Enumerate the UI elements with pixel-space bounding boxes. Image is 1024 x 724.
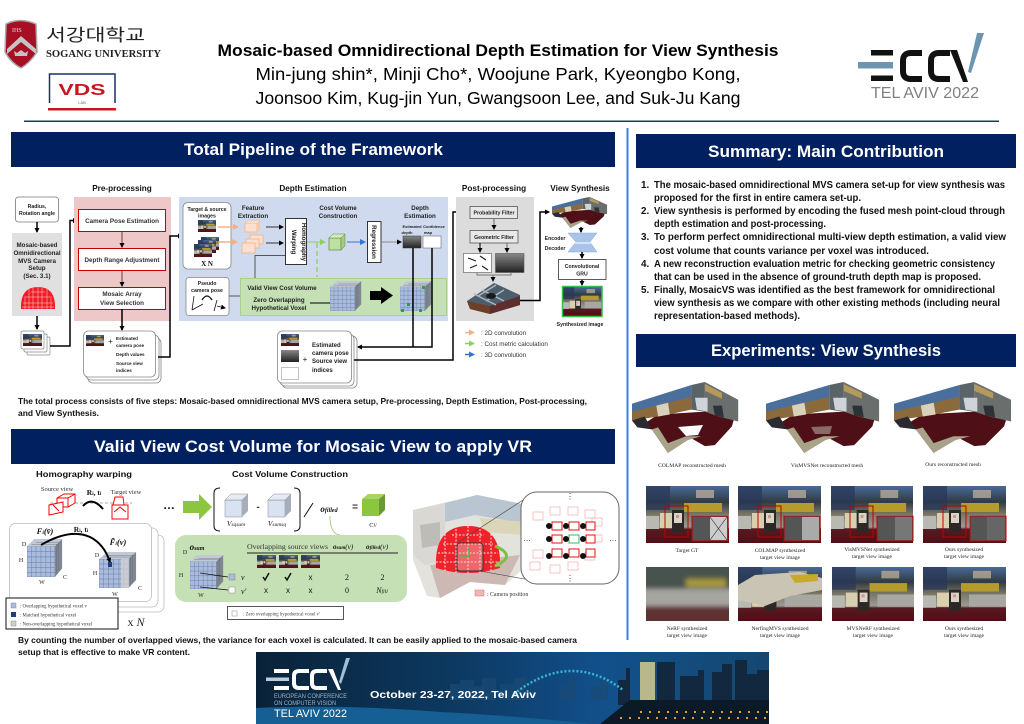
panel: overlapping table: D bbox=[183, 550, 188, 556]
panel: cost volume construction: Cost Volume Construction bbox=[232, 470, 348, 479]
panel: valid view cost volume: Hypothetical Voxel bbox=[252, 305, 307, 312]
panel: synthesized views row 1: target view image bbox=[852, 554, 892, 560]
panel: overlapping table: v bbox=[241, 573, 245, 582]
legend: voxel types: : Non-overlapping hypothetical voxel bbox=[20, 622, 93, 628]
panel: homography warping: Source view bbox=[41, 486, 73, 493]
panel: overlapping table: x bbox=[308, 586, 312, 595]
panel: reconstructed meshes: Ours reconstructed mesh bbox=[925, 462, 981, 468]
panel: homography warping: D bbox=[95, 553, 100, 559]
panel: MVS camera setup: Rotation angle bbox=[19, 211, 55, 217]
panel: homography warping: Fi(v̄) bbox=[36, 526, 53, 536]
banner: ECCV conference bbox=[256, 652, 769, 724]
text: summary list: The mosaic-based omnidirectional MVS camera set-up for view synthesis was bbox=[654, 180, 1005, 191]
heading: Experiments: Experiments: View Synthesis bbox=[711, 342, 941, 360]
panel: homography warping bbox=[6, 470, 175, 629]
heading: Summary: Summary: Main Contribution bbox=[708, 143, 944, 161]
panel: overlapping table: Nfill bbox=[375, 586, 388, 595]
heading: Summary bbox=[636, 134, 1016, 168]
box: target and source images: images bbox=[198, 214, 216, 220]
panel: homography warping: Ri, ti bbox=[87, 488, 102, 497]
panel: synthesized views row 2: NeRF synthesized bbox=[667, 626, 708, 632]
text: summary list bbox=[641, 180, 1006, 322]
text: pipeline caption bbox=[18, 396, 587, 418]
panel: view synthesis: Synthesized image bbox=[557, 322, 603, 328]
panel: pre-processing output stack: Source view bbox=[116, 361, 143, 366]
panel: synthesized views row 2: MVSNeRF synthesized bbox=[846, 626, 900, 632]
heading: Valid View Cost Volume bbox=[11, 429, 615, 464]
panel: depth estimation bbox=[179, 197, 448, 321]
panel: mosaic camera room: ⋮ bbox=[566, 492, 574, 501]
panel: pre-processing output stack: + bbox=[108, 337, 113, 346]
logo: Sogang University bbox=[5, 20, 161, 68]
text: summary list: A new reconstruction evaluation metric for checking geometric consistency bbox=[654, 259, 995, 270]
icon: red camera dome bbox=[21, 287, 55, 309]
heading: Valid View Cost Volume: Valid View Cost Volume for Mosaic View to apply VR bbox=[94, 438, 532, 456]
text: cost volume caption bbox=[18, 635, 577, 657]
text: summary list: view synthesis as we compare with other existing methods (including neural bbox=[654, 298, 1000, 309]
panel: overlapping table: v′ bbox=[241, 587, 247, 596]
panel: MVS camera setup: Setup bbox=[28, 265, 46, 272]
panel: homography warping: W bbox=[112, 592, 118, 598]
text: summary list: To perform perfect omnidirectional multi-view depth estimation, a valid view bbox=[654, 232, 1006, 243]
panel: overlapping table: W bbox=[198, 593, 204, 599]
panel: reconstructed meshes: COLMAP reconstructed mesh bbox=[658, 463, 726, 469]
panel: synthesized views row 2: NerfingMVS synthesized bbox=[751, 625, 809, 632]
panel: homography warping: Target view bbox=[111, 489, 142, 496]
legend: zero overlapping voxel bbox=[228, 606, 344, 620]
feature extraction: Extraction bbox=[238, 213, 268, 220]
panel: mosaic camera room bbox=[413, 492, 619, 598]
panel: depth estimation: Depth bbox=[411, 205, 429, 212]
panel: homography warping: x N bbox=[127, 615, 145, 629]
mosaic camera grid bbox=[530, 507, 602, 573]
text: summary list: 5. bbox=[641, 285, 649, 296]
panel: overlapping table: ofilled(v) bbox=[366, 543, 389, 551]
panel: MVS camera setup bbox=[12, 197, 62, 355]
equation: ofilled bbox=[320, 504, 339, 514]
panel: synthesized views row 1: Ours synthesized bbox=[945, 547, 983, 553]
box: regression bbox=[368, 222, 381, 262]
text: summary list: representation-based methods). bbox=[654, 311, 800, 322]
panel: depth output stack: indices bbox=[312, 368, 333, 374]
panel: MVS camera setup: Mosaic-based bbox=[17, 242, 58, 249]
text: summary list: depth estimation and post-processing. bbox=[654, 219, 826, 230]
panel: homography warping: Homography warping bbox=[36, 470, 132, 479]
stacked feature cards bbox=[10, 524, 164, 612]
panel: homography warping: Ri, ti bbox=[74, 525, 89, 534]
logo: VDS lab: LAB bbox=[78, 100, 86, 105]
panel: section titles of pipeline: Pre-processing bbox=[92, 184, 152, 193]
panel: homography warping: H bbox=[19, 558, 24, 564]
panel: cost volume construction bbox=[175, 470, 407, 620]
text: summary list: 2. bbox=[641, 206, 649, 217]
title: Min-jung shin*, Minji Cho*, Woojune Park, Kyeongbo Kong, bbox=[256, 64, 740, 84]
panel: section titles of pipeline bbox=[92, 184, 610, 193]
panel: overlapping table: x bbox=[264, 586, 268, 595]
panel: homography warping: C bbox=[63, 575, 67, 581]
equation: CV bbox=[369, 522, 378, 529]
panel: mosaic camera room: ⋮ bbox=[566, 574, 574, 583]
panel: overlapping table: 2 bbox=[345, 573, 349, 582]
panel: view synthesis: Convolutional bbox=[565, 264, 600, 270]
box: pseudo camera pose: Pseudo bbox=[198, 281, 216, 287]
panel: section titles of pipeline: View Synthesis bbox=[550, 184, 610, 193]
box: target and source images: Target & source bbox=[187, 207, 227, 213]
text: summary list: 3. bbox=[641, 232, 649, 243]
icon: source and target cameras bbox=[49, 494, 132, 519]
equation: - bbox=[256, 502, 260, 513]
logo: Sogang University: 서강대학교 bbox=[46, 26, 145, 45]
panel: valid view cost volume bbox=[240, 278, 446, 316]
panel: pre-processing output stack: Depth values bbox=[116, 352, 145, 357]
panel: reconstructed meshes bbox=[632, 382, 1011, 469]
icon: green cube bbox=[329, 234, 345, 250]
title bbox=[218, 42, 778, 108]
text: summary list: 1. bbox=[641, 180, 649, 191]
text: pipeline caption: and View Synthesis. bbox=[18, 408, 99, 418]
equation: Vsqsum bbox=[227, 519, 245, 528]
text: summary list: 4. bbox=[641, 259, 649, 270]
text: pipeline caption: The total process consists of five steps: Mosaic-based omnidirectional MVS camera setup, Pre-processing, Depth Estimation, Post-processing, bbox=[18, 396, 587, 406]
logo: ECCV Tel Aviv 2022: TEL AVIV 2022 bbox=[871, 85, 979, 102]
panel: overlapping table: x bbox=[308, 573, 312, 582]
logo: Sogang University: SOGANG UNIVERSITY bbox=[46, 49, 161, 60]
panel: homography warping: F̃i(v) bbox=[109, 537, 126, 547]
panel: synthesized views row 2: target view image bbox=[667, 633, 707, 639]
legend: voxel types: : Overlapping hypothetical voxel v bbox=[20, 604, 87, 610]
panel: synthesized views row 2: target view image bbox=[853, 633, 893, 639]
panel: synthesized views row 2: target view image bbox=[944, 633, 984, 639]
panel: depth output stack: camera pose bbox=[312, 351, 349, 357]
panel: mosaic camera room: … bbox=[523, 534, 531, 543]
panel: pre-processing: Depth Range Adjustment bbox=[85, 257, 160, 264]
arrow: green bbox=[183, 494, 212, 520]
equation: = bbox=[352, 502, 358, 513]
box: target and source images: X N bbox=[201, 260, 213, 268]
text: summary list: View synthesis is performed by encoding the fused mesh point-cloud through bbox=[654, 206, 1005, 217]
text: summary list: that can be used in the absence of ground-truth depth map is proposed. bbox=[654, 272, 981, 283]
title: Joonsoo Kim, Kug-jin Yun, Gwangsoon Lee, and Suk-Ju Kang bbox=[256, 88, 740, 108]
box: pseudo camera pose: camera pose bbox=[191, 288, 223, 294]
panel: overlapping table: osum(v) bbox=[333, 543, 354, 551]
logo: Sogang University: IHS bbox=[12, 28, 22, 34]
panel: homography warping: H bbox=[93, 571, 98, 577]
feature extraction bbox=[218, 205, 283, 253]
panel: valid view cost volume: Valid View Cost Volume bbox=[247, 285, 317, 292]
title: Mosaic-based Omnidirectional Depth Estimation for View Synthesis bbox=[218, 42, 778, 60]
panel: section titles of pipeline: Depth Estimation bbox=[279, 184, 347, 193]
text: summary list: cost volume that counts variance per voxel was introduced. bbox=[654, 246, 929, 257]
legend: convolution arrows: : Cost metric calculation bbox=[481, 341, 548, 348]
panel: pre-processing output stack: camera pose bbox=[116, 343, 145, 348]
panel: MVS camera setup: Omnidirectional bbox=[13, 250, 61, 257]
text: cost volume caption: By counting the number of overlapped views, the variance for each voxel is calculated. It can be easily applied to the mosaic-based camera bbox=[18, 635, 577, 645]
panel: synthesized views row 2: Ours synthesized bbox=[945, 626, 983, 632]
heading: Experiments bbox=[636, 334, 1016, 367]
equation bbox=[214, 488, 385, 531]
legend: convolution arrows bbox=[465, 330, 548, 359]
panel: depth estimation: Estimated bbox=[402, 224, 422, 229]
panel: overlapping table: x bbox=[286, 586, 290, 595]
box: homography warping bbox=[286, 218, 307, 264]
banner: ECCV conference: October 23-27, 2022, Tel Aviv bbox=[370, 689, 536, 701]
panel: overlapping table: 2 bbox=[380, 573, 384, 582]
panel: depth output stack bbox=[278, 331, 357, 388]
panel: synthesized views row 1: target view image bbox=[760, 555, 800, 561]
panel: mosaic camera room: : Camera position bbox=[487, 592, 528, 598]
text: summary list: Finally, MosaicVS was identified as the best framework for omnidirectional bbox=[654, 285, 995, 296]
panel: valid view cost volume: Zero Overlapping bbox=[253, 297, 305, 304]
legend: convolution arrows: : 3D convolution bbox=[481, 352, 527, 359]
panel: depth estimation: map bbox=[424, 230, 433, 235]
panel: depth output stack: + bbox=[303, 355, 308, 364]
panel: view synthesis: Decoder bbox=[545, 246, 565, 252]
panel: homography warping: C bbox=[138, 586, 142, 592]
panel: depth estimation: Cost Volume bbox=[319, 205, 357, 212]
panel: synthesized views row 1: Target GT bbox=[676, 548, 699, 554]
panel: synthesized views row 1: target view image bbox=[944, 554, 984, 560]
panel: synthesized views row 1 bbox=[646, 486, 1006, 561]
box: homography warping: Warping bbox=[290, 230, 297, 254]
panel: post-processing: Geometric Filter bbox=[474, 235, 514, 241]
legend: zero overlapping voxel: : Zero overlapping hypothetical voxel v′ bbox=[243, 612, 320, 618]
panel: depth estimation: Construction bbox=[319, 213, 357, 220]
panel: MVS camera setup: (Sec. 3.1) bbox=[23, 273, 51, 280]
banner: ECCV conference: EUROPEAN CONFERENCE bbox=[274, 694, 347, 700]
text: summary list: proposed for the first in entire camera set-up. bbox=[654, 193, 861, 204]
panel: post-processing: Probability Filter bbox=[474, 210, 514, 216]
banner: ECCV conference: ON COMPUTER VISION bbox=[274, 701, 336, 707]
panel: reconstructed meshes: VisMVSNet reconstructed mesh bbox=[791, 463, 863, 469]
panel: pre-processing output stack: Estimated bbox=[116, 336, 138, 341]
logo: VDS lab: VDS bbox=[58, 82, 106, 99]
panel: depth output stack: Estimated bbox=[312, 343, 341, 349]
panel: homography warping: W bbox=[39, 580, 45, 586]
panel: mosaic camera room: … bbox=[609, 534, 617, 543]
panel: pre-processing: Camera Pose Estimation bbox=[85, 218, 159, 225]
panel: post-processing bbox=[456, 197, 534, 321]
heading: Total Pipeline of the Framework bbox=[11, 132, 615, 167]
panel: pre-processing output stack bbox=[84, 331, 161, 383]
logo: ECCV Tel Aviv 2022 bbox=[858, 33, 984, 102]
box: homography warping: Homography bbox=[300, 223, 307, 262]
panel: depth estimation: depth bbox=[402, 230, 413, 235]
panel: pre-processing: Mosaic Array bbox=[102, 291, 142, 298]
panel: pre-processing bbox=[74, 197, 171, 321]
panel: view synthesis bbox=[545, 197, 607, 328]
panel: pre-processing output stack: indices bbox=[116, 368, 132, 373]
panel: depth output stack: Source view bbox=[312, 359, 347, 365]
panel: synthesized views row 1: COLMAP synthesized bbox=[755, 548, 805, 554]
panel: overlapping table: H bbox=[179, 573, 184, 579]
panel: overlapping table bbox=[175, 535, 407, 602]
equation: Vsumsq bbox=[268, 519, 286, 528]
panel: synthesized views row 1: VisMVSNet synthesized bbox=[844, 547, 900, 553]
text: cost volume caption: setup that is effective to make VR content. bbox=[18, 647, 190, 657]
legend: convolution arrows: : 2D convolution bbox=[481, 330, 527, 337]
legend: voxel types: : Matched hypothetical voxel bbox=[20, 614, 77, 618]
panel: view synthesis: GRU bbox=[576, 272, 588, 278]
box: pseudo camera pose bbox=[186, 278, 229, 316]
panel: MVS camera setup: Radius, bbox=[28, 204, 47, 210]
legend: voxel types bbox=[6, 598, 118, 629]
panel: overlapping table: Overlapping source views bbox=[247, 542, 328, 551]
icon: red camera dome bbox=[436, 526, 500, 575]
mesh render bbox=[467, 283, 520, 314]
panel: synthesized views row 2 bbox=[641, 562, 1006, 639]
panel: pre-processing: View Selection bbox=[100, 300, 144, 307]
panel: homography warping: … bbox=[163, 498, 175, 512]
heading: Total Pipeline of the Framework: Total Pipeline of the Framework bbox=[184, 141, 444, 159]
banner: ECCV conference: TEL AVIV 2022 bbox=[274, 708, 347, 720]
logo: VDS lab bbox=[48, 74, 116, 110]
panel: overlapping table: 0 bbox=[345, 586, 349, 595]
feature extraction: Feature bbox=[242, 205, 265, 212]
panel: depth estimation: Estimation bbox=[404, 213, 436, 220]
panel: view synthesis: Encoder bbox=[545, 236, 565, 242]
panel: homography warping: D bbox=[22, 542, 27, 548]
box: target and source images bbox=[183, 202, 231, 269]
panel: overlapping table: osum bbox=[190, 542, 205, 552]
panel: depth estimation: Confidence bbox=[423, 224, 446, 229]
panel: MVS camera setup: MVS Camera bbox=[18, 258, 56, 265]
icon: stacked images bbox=[21, 331, 50, 355]
panel: synthesized views row 2: target view image bbox=[760, 633, 800, 639]
box: regression: Regression bbox=[370, 225, 377, 259]
panel: section titles of pipeline: Post-processing bbox=[462, 184, 526, 193]
